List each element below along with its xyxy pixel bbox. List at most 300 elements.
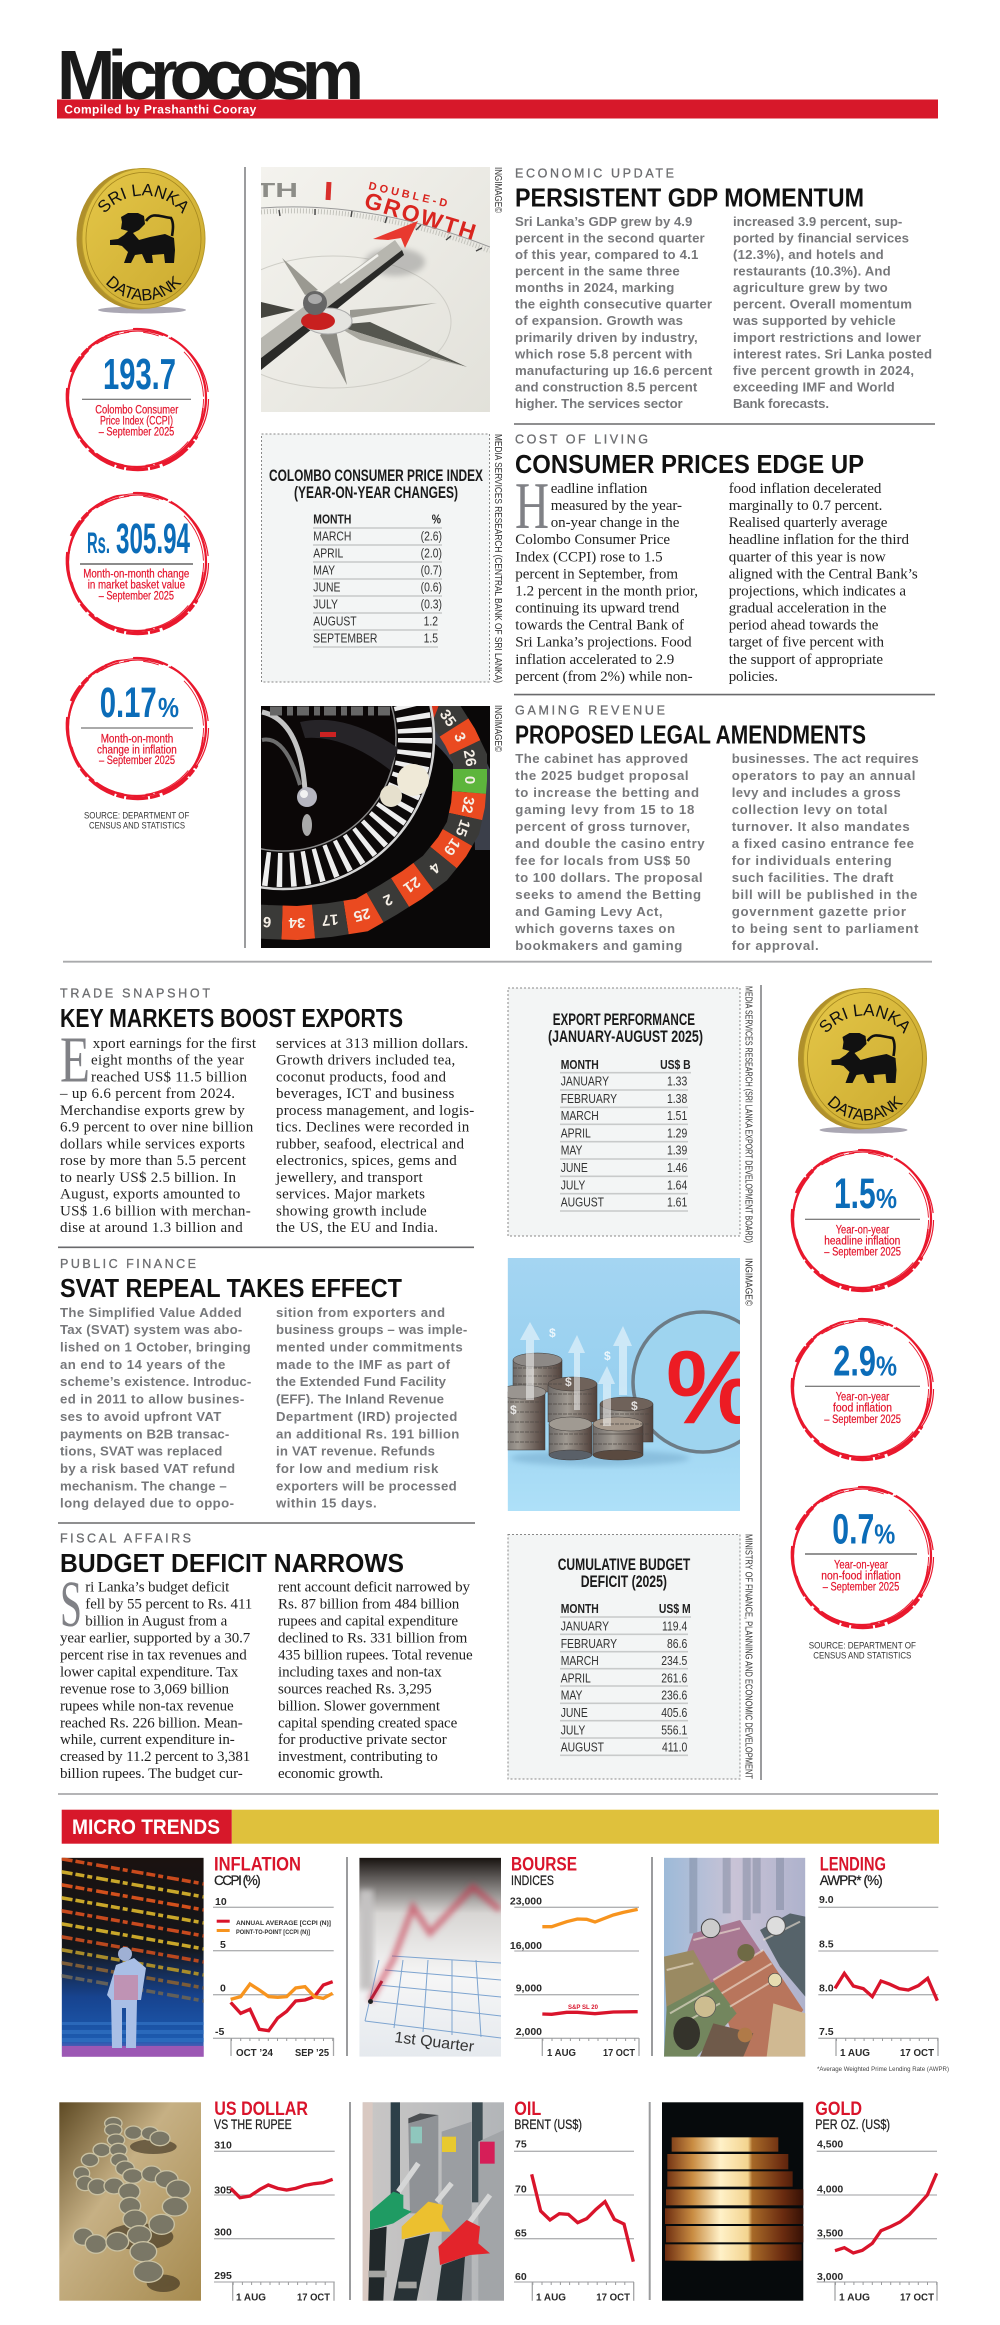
article: Budget Deficit Narrows: S [60,1568,82,1641]
image: banknotes and coins [664,1858,805,2057]
panel: Colombo Consumer Price Index table: (0.6) [421,581,442,595]
article: Budget Deficit Narrows: rent account deficit narrowed by [278,1580,470,1596]
article: SVAT Repeal Takes Effect: The Simplified Value Added [60,1305,242,1320]
article: Budget Deficit Narrows: ri Lanka’s budget deficit [85,1580,230,1596]
panel: Export Performance table: FEBRUARY [561,1092,617,1106]
article: SVAT Repeal Takes Effect: business groups – was imple- [276,1322,467,1337]
chart: Oil Brent: BRENT (US$) [514,2117,582,2132]
stat: food inflation 2.9%: food inflation [833,1403,892,1415]
article: Proposed Legal Amendments: a fixed casino entrance fee [732,836,914,851]
stat: non-food inflation 0.7%: non-food inflation [821,1570,901,1582]
chart: Lending AWPR [818,1855,938,2059]
article: Key Markets Boost Exports: eight months of the year [91,1053,244,1069]
article: Persistent GDP Momentum: of expansion. Growth was [515,313,683,328]
article: Budget Deficit Narrows: percent rise in tax revenues and [60,1647,247,1663]
source note right: CENSUS AND STATISTICS [813,1651,911,1661]
article: Key Markets Boost Exports: August, exports amounted to [60,1187,240,1203]
image: roulette wheel: 35 [436,707,459,730]
image: roulette wheel: 2 [380,890,395,909]
article: Budget Deficit Narrows: revenue rose to 3,069 billion [60,1681,230,1697]
article: SVAT Repeal Takes Effect [60,1257,467,1511]
article: SVAT Repeal Takes Effect: within 15 days. [275,1496,377,1511]
article: Budget Deficit Narrows: including taxes and non-tax [278,1664,442,1680]
chart: Gold per ounce: PER OZ. (US$) [815,2117,890,2132]
image: compass pointing to double-digit growth: DOUBLE-D [367,180,452,211]
panel: Colombo Consumer Price Index table: JUNE [313,581,341,595]
chart: Inflation CCPI: 0 [220,1983,226,1995]
image: roulette wheel: 0 [461,776,478,784]
article: SVAT Repeal Takes Effect: tions, SVAT was replaced [60,1444,222,1459]
credit: Sri Lanka Export Development Board: MEDIA SERVICES RESEARCH (SRI LANKA EXPORT DEVELOPMENT BOARD) [743,986,754,1243]
article: Consumer Prices Edge Up: projections, which indicates a [729,584,906,600]
panel: Export Performance table: US$ B [660,1058,691,1072]
image: roulette wheel: 25 [352,904,372,925]
article: Budget Deficit Narrows: lower capital expenditure. Tax [60,1664,239,1680]
article: Budget Deficit Narrows: BUDGET DEFICIT NARROWS [60,1548,404,1578]
article: Proposed Legal Amendments: for individuals entering [732,853,892,868]
article: SVAT Repeal Takes Effect: exporters will be processed [276,1478,457,1493]
panel: Cumulative Budget Deficit table: APRIL [561,1671,591,1686]
image: coins and percent magnifier [508,1258,740,1511]
article: Key Markets Boost Exports: TRADE SNAPSHOT [60,986,210,1000]
panel: Colombo Consumer Price Index table: (0.7) [421,564,442,578]
stat: market basket Rs. 305.94: – September 2025 [99,591,174,603]
chart: Inflation CCPI: 10 [215,1896,227,1908]
stat: CCPI 193.7: 193.7 [103,350,176,399]
stat: monthly inflation 0.17%: 0.17 [100,679,157,727]
article: Proposed Legal Amendments: and Gaming Levy Act, [515,904,663,919]
article: SVAT Repeal Takes Effect: made to the IMF as part of [276,1357,451,1372]
chart: Oil Brent [514,2099,634,2304]
article: Consumer Prices Edge Up: towards the Central Bank of [515,618,684,634]
panel: Cumulative Budget Deficit table: FEBRUARY [561,1637,617,1651]
article: Consumer Prices Edge Up: eadline inflation [551,481,648,497]
chart: US Dollar vs rupee: 300 [214,2226,232,2238]
article: Proposed Legal Amendments: such facilities. The draft [732,870,894,885]
image: coins forming a dollar sign [59,2102,201,2301]
panel: Colombo Consumer Price Index table: COLOMBO CONSUMER PRICE INDEX [269,467,483,485]
panel: Export Performance table: EXPORT PERFORMANCE [553,1011,695,1029]
panel: Export Performance table: (JANUARY-AUGUST 2025) [548,1028,703,1046]
article: SVAT Repeal Takes Effect: long delayed due to oppo- [60,1496,234,1511]
article: Proposed Legal Amendments: bill will be published in the [732,887,917,902]
article: Consumer Prices Edge Up: aligned with the Central Bank’s [729,566,918,582]
article: Consumer Prices Edge Up: inflation accelerated to 2.9 [515,652,674,668]
stat: CCPI 193.7: Colombo Consumer [95,404,178,416]
stat: market basket Rs. 305.94: Month-on-month change [83,569,189,581]
chart: US Dollar vs rupee: 305 [214,2184,232,2196]
article: Key Markets Boost Exports: services. Major markets [276,1187,425,1203]
article: Proposed Legal Amendments: bookmakers and gaming [515,938,682,953]
chart: Gold per ounce: 3,500 [817,2228,843,2240]
masthead [57,36,938,118]
article: Budget Deficit Narrows: sources reached Rs. 3,295 [278,1681,432,1697]
stat: food inflation 2.9%: % [876,1351,897,1382]
credit: Ingimage roulette: INGIMAGE© [492,705,503,753]
image: roulette wheel: 19 [440,835,463,858]
stat: food inflation 2.9%: – September 2025 [824,1414,901,1426]
article: Budget Deficit Narrows [60,1532,473,1782]
article: Budget Deficit Narrows: rupees and capital expenditure [278,1613,458,1629]
panel: Cumulative Budget Deficit table: 86.6 [667,1637,688,1651]
icon: Sri Lanka Databank coin (right): DATABANK [828,1096,904,1121]
source note left: CENSUS AND STATISTICS [89,821,185,831]
stat: market basket Rs. 305.94: in market basket value [88,580,185,592]
chart: Oil Brent: 17 OCT [596,2292,631,2304]
chart: US Dollar vs rupee [214,2099,335,2304]
article: Budget Deficit Narrows: Rs. 87 billion from 484 billion [278,1596,460,1612]
panel: Cumulative Budget Deficit table: AUGUST [561,1741,604,1755]
article: Budget Deficit Narrows: creased by 11.2 percent to 3,381 [60,1749,250,1765]
article: Persistent GDP Momentum: increased 3.9 percent, sup- [733,214,902,229]
credit: Media Services Research CBSL: MEDIA SERVICES RESEARCH (CENTRAL BANK OF SRI LANKA) [492,434,503,683]
stat: non-food inflation 0.7%: % [874,1518,895,1549]
article: Key Markets Boost Exports: the US, the EU and India. [276,1220,438,1236]
article: Consumer Prices Edge Up: on-year change in the [551,515,680,531]
article: Proposed Legal Amendments: The cabinet has approved [515,751,688,766]
article: Consumer Prices Edge Up: percent (from 2%) while non- [515,669,693,685]
panel: Export Performance table: MARCH [561,1109,599,1123]
panel: Colombo Consumer Price Index table: (YEAR-ON-YEAR CHANGES) [294,484,458,502]
article: Proposed Legal Amendments: gaming levy from 15 to 18 [515,802,694,817]
source note right: SOURCE: DEPARTMENT OF [809,1640,916,1650]
article: Key Markets Boost Exports: Merchandise exports grew by [60,1103,245,1119]
stat: monthly inflation 0.17% [67,657,209,799]
article: Proposed Legal Amendments: turnover. It also mandates [732,819,910,834]
masthead: Microcosm [57,36,364,114]
article: SVAT Repeal Takes Effect: mented under commitments [276,1340,463,1354]
article: Proposed Legal Amendments: percent of gross turnover, [515,819,690,834]
credit: Ministry of Finance: MINISTRY OF FINANCE, PLANNING AND ECONOMIC DEVELOPMENT [743,1534,754,1779]
stat: market basket Rs. 305.94: Rs. [87,527,110,560]
stat: food inflation 2.9%: 2.9 [833,1338,876,1386]
article: Persistent GDP Momentum: and construction 8.5 percent [515,380,698,394]
source note left: SOURCE: DEPARTMENT OF [84,810,190,820]
chart: Inflation CCPI: 5 [220,1939,226,1951]
panel: Cumulative Budget Deficit table: 405.6 [661,1706,688,1720]
source note left [84,810,190,831]
article: Consumer Prices Edge Up: headline inflation for the third [729,532,910,548]
chart: Inflation CCPI: -5 [215,2026,224,2038]
article: Persistent GDP Momentum: percent. Overall momentum [733,297,912,312]
icon: Sri Lanka Databank coin: DATABANK [106,276,182,301]
chart: Bourse indices: 9,000 [516,1983,542,1995]
panel: Colombo Consumer Price Index table: % [432,513,441,527]
article: Proposed Legal Amendments: the 2025 budget proposal [515,768,689,783]
panel: Colombo Consumer Price Index table: 1.2 [424,615,438,629]
chart: Gold per ounce: 4,500 [817,2139,843,2151]
icon: Sri Lanka Databank coin [76,168,206,314]
article: Consumer Prices Edge Up: CONSUMER PRICES EDGE UP [515,449,864,479]
chart: Bourse indices: 1 AUG [547,2047,576,2059]
stat: CCPI 193.7: Price Index (CCPI) [100,415,173,427]
image: coins and percent magnifier: $ [565,1375,572,1389]
chart: Inflation CCPI: CCPI (%) [214,1873,261,1888]
article: Consumer Prices Edge Up: Index (CCPI) rose to 1.5 [515,549,663,565]
image: coins and percent magnifier: $ [549,1326,556,1340]
icon: Sri Lanka Databank coin (right): SRI LANKA [820,1004,909,1034]
article: Persistent GDP Momentum: percent in the same three [515,264,680,278]
article: Proposed Legal Amendments: collection levy on total [732,802,887,817]
panel: Export Performance table: 1.39 [667,1144,687,1158]
stat: monthly inflation 0.17%: change in inflation [97,744,177,756]
article: Key Markets Boost Exports: services at 313 million dollars. [276,1036,468,1052]
image: roulette wheel: 26 [460,748,479,768]
panel: Cumulative Budget Deficit table: MARCH [561,1654,599,1668]
article: Budget Deficit Narrows: reached Rs. 226 billion. Mean- [60,1715,243,1731]
article: Persistent GDP Momentum: import restrictions and lower [733,330,921,345]
image: roulette wheel [261,706,490,948]
chart: Gold per ounce: 3,000 [817,2271,843,2283]
article: SVAT Repeal Takes Effect: PUBLIC FINANCE [60,1257,196,1271]
article: Proposed Legal Amendments: levy and includes a gross [732,785,901,800]
chart: Lending AWPR: LENDING [820,1855,886,1876]
article: Consumer Prices Edge Up: Realised quarterly average [729,515,888,531]
panel: Cumulative Budget Deficit table: JUNE [561,1706,588,1720]
chart: Bourse indices: 2,000 [516,2026,542,2038]
article: Persistent GDP Momentum: five percent growth in 2024, [733,363,914,378]
article: Persistent GDP Momentum: Sri Lanka’s GDP grew by 4.9 [515,214,692,229]
image: roulette wheel: 6 [262,913,272,930]
stat: food inflation 2.9% [792,1318,934,1460]
article: Persistent GDP Momentum: higher. The services sector [515,396,683,411]
article: Proposed Legal Amendments: businesses. The act requires [732,751,919,766]
footnote: AWPR definition: *Average Weighted Prime Lending Rate (AWPR) [817,2066,949,2073]
article: SVAT Repeal Takes Effect: sition from exporters and [276,1305,445,1320]
panel: Cumulative Budget Deficit table: MAY [561,1689,583,1703]
article: Proposed Legal Amendments: operators to pay an annual [732,768,915,783]
article: Persistent GDP Momentum: ECONOMIC UPDATE [515,166,674,180]
article: Consumer Prices Edge Up: food inflation decelerated [729,481,882,497]
chart: US Dollar vs rupee: 1 AUG [236,2292,266,2304]
icon: Sri Lanka Databank coin (right) [798,988,927,1134]
article: Proposed Legal Amendments: to being sent to parliament [732,921,919,936]
article: Persistent GDP Momentum: Bank forecasts. [733,396,829,411]
article: Proposed Legal Amendments: seeks to amend the Betting [515,887,701,902]
panel: Export Performance table: 1.61 [667,1196,687,1210]
article: Consumer Prices Edge Up: gradual acceleration in the [729,601,887,617]
chart: Gold per ounce: 4,000 [817,2184,843,2196]
article: Consumer Prices Edge Up: policies. [729,669,778,685]
panel: Colombo Consumer Price Index table: (0.3) [421,598,442,612]
chart: Gold per ounce [815,2099,937,2304]
chart: Lending AWPR: 1 AUG [840,2047,870,2059]
stat: monthly inflation 0.17%: – September 2025 [99,755,175,767]
chart: Bourse indices: 23,000 [510,1895,542,1907]
image: compass pointing to double-digit growth [261,167,490,412]
article: Proposed Legal Amendments: GAMING REVENUE [515,704,665,718]
panel: Export Performance table: MAY [561,1144,583,1158]
article: Consumer Prices Edge Up [515,432,918,685]
article: Key Markets Boost Exports [59,986,474,1236]
panel: Colombo Consumer Price Index table: JULY [313,598,338,612]
heading: Micro Trends banner [62,1810,939,1844]
chart: Inflation CCPI: SEP ’25 [295,2047,329,2059]
article: Proposed Legal Amendments: fee for locals from US$ 50 [515,853,690,868]
chart: US Dollar vs rupee: 310 [214,2139,232,2151]
article: Key Markets Boost Exports: showing growth include [276,1203,427,1219]
article: Key Markets Boost Exports: E [60,1024,90,1096]
panel: Colombo Consumer Price Index table: (2.6) [421,530,442,544]
chart: US Dollar vs rupee: VS THE RUPEE [214,2117,292,2132]
source note right [809,1640,916,1661]
article: SVAT Repeal Takes Effect: the Extended Fund Facility [276,1374,447,1389]
panel: Export Performance table: MONTH [561,1058,599,1072]
panel: Colombo Consumer Price Index table: APRIL [313,547,344,561]
article: Key Markets Boost Exports: to nearly US$ 2.5 billion. In [60,1170,236,1186]
stat: headline inflation 1.5%: % [876,1183,897,1214]
article: SVAT Repeal Takes Effect: (EFF). The Inland Revenue [276,1392,444,1407]
article: Budget Deficit Narrows: billion. Slower government [278,1698,441,1714]
article: Budget Deficit Narrows: rupees while non-tax revenue [60,1698,234,1714]
article: Budget Deficit Narrows: FISCAL AFFAIRS [60,1532,191,1546]
stat: market basket Rs. 305.94 [67,492,209,634]
panel: Colombo Consumer Price Index table: AUGUST [313,615,357,629]
article: Key Markets Boost Exports: dise at around 1.3 billion and [60,1220,243,1236]
article: Proposed Legal Amendments: and double the casino entry [515,836,705,851]
panel: Colombo Consumer Price Index table: (2.0) [421,547,442,561]
chart: Gold per ounce: 17 OCT [900,2292,935,2304]
panel: Colombo Consumer Price Index table: SEPTEMBER [313,632,377,646]
panel: Export Performance table: 1.46 [667,1161,688,1175]
article: Key Markets Boost Exports: process management, and logis- [276,1103,474,1119]
article: SVAT Repeal Takes Effect: for low and medium risk [276,1461,439,1476]
chart: Bourse indices: 17 OCT [603,2047,636,2059]
panel: Cumulative Budget Deficit table: 556.1 [661,1723,687,1738]
panel: Colombo Consumer Price Index table: MAY [313,564,335,578]
chart: Oil Brent: 70 [515,2184,527,2196]
stat: headline inflation 1.5%: 1.5 [834,1170,876,1218]
panel: Cumulative Budget Deficit table: 236.6 [661,1689,688,1703]
chart: Lending AWPR: 9.0 [819,1894,834,1906]
heading: Micro Trends banner: MICRO TRENDS [72,1816,220,1839]
icon: Sri Lanka Databank coin: SRI LANKA [98,184,188,214]
article: Persistent GDP Momentum: restaurants (10.3%). And [733,264,891,278]
article: SVAT Repeal Takes Effect: payments on B2B transac- [60,1426,229,1441]
article: Key Markets Boost Exports: dollars while services exports [60,1136,245,1152]
article: Budget Deficit Narrows: capital spending created space [278,1715,458,1731]
article: SVAT Repeal Takes Effect: scheme’s existence. Introduc- [60,1374,251,1389]
stat: market basket Rs. 305.94: 305.94 [116,515,190,563]
panel: Cumulative Budget Deficit table: 261.6 [661,1671,688,1686]
article: Consumer Prices Edge Up: target of five percent with [729,635,884,651]
article: Persistent GDP Momentum: of this year, compared to 4.1 [515,247,698,262]
article: Persistent GDP Momentum: agriculture grew by two [733,280,888,295]
chart: Bourse indices: S&P SL 20 [568,2004,598,2011]
article: Budget Deficit Narrows: billion rupees. The budget cur- [60,1766,243,1782]
article: SVAT Repeal Takes Effect: Department (IRD) projected [276,1409,457,1424]
article: Budget Deficit Narrows: 435 billion rupees. Total revenue [278,1647,473,1663]
panel: Export Performance table [508,988,740,1236]
panel: Export Performance table: 1.51 [667,1109,687,1123]
stat: monthly inflation 0.17%: % [158,692,179,723]
article: SVAT Repeal Takes Effect: lished on 1 October, bringing [60,1340,251,1354]
article: Consumer Prices Edge Up: H [515,469,549,543]
article: SVAT Repeal Takes Effect: SVAT REPEAL TAKES EFFECT [60,1273,402,1303]
article: Budget Deficit Narrows: year earlier, supported by a 30.7 [60,1630,251,1646]
article: Proposed Legal Amendments: to increase the betting and [515,785,699,800]
article: Proposed Legal Amendments: which governs taxes on [514,921,675,936]
stat: food inflation 2.9%: Year-on-year [836,1391,889,1403]
article: Persistent GDP Momentum: primarily driven by industry, [515,330,698,345]
chart: Oil Brent: 65 [515,2228,527,2240]
article: Budget Deficit Narrows: while, current expenditure in- [60,1732,235,1748]
article: Consumer Prices Edge Up: COST OF LIVING [515,432,648,446]
article: Consumer Prices Edge Up: marginally to 0.7 percent. [729,498,882,514]
article: Budget Deficit Narrows: economic growth. [278,1766,383,1782]
article: Persistent GDP Momentum: which rose 5.8 percent with [514,346,692,361]
article: Persistent GDP Momentum: interest rates. Sri Lanka posted [733,346,932,361]
article: Budget Deficit Narrows: fell by 55 percent to Rs. 411 [85,1596,252,1612]
image: roulette wheel: 17 [321,910,339,929]
image: compass pointing to double-digit growth: TH [256,180,298,202]
article: Persistent GDP Momentum: percent in the second quarter [515,230,705,245]
article: Budget Deficit Narrows: investment, contributing to [278,1749,438,1765]
chart: Inflation CCPI [213,1855,334,2059]
article: Key Markets Boost Exports: coconut products, food and [276,1070,446,1086]
chart: Oil Brent: 1 AUG [536,2292,566,2304]
article: Key Markets Boost Exports: beverages, ICT and business [276,1086,454,1102]
chart: Inflation CCPI: INFLATION [214,1855,301,1876]
article: Proposed Legal Amendments: PROPOSED LEGAL AMENDMENTS [515,719,866,749]
image: roulette wheel: 15 [452,817,473,839]
image: roulette wheel: 32 [458,795,477,815]
image: compass pointing to double-digit growth: GROWTH [362,187,481,246]
article: Persistent GDP Momentum: ported by financial services [733,230,909,245]
stat: non-food inflation 0.7% [792,1486,934,1628]
article: Key Markets Boost Exports: Growth drivers included tea, [276,1053,455,1069]
article: SVAT Repeal Takes Effect: in VAT revenue. Refunds [276,1444,435,1459]
chart: US Dollar vs rupee: 17 OCT [297,2292,331,2304]
article: SVAT Repeal Takes Effect: mechanism. The change – [60,1478,227,1493]
credit: Ingimage coins: INGIMAGE© [743,1258,754,1307]
image: roulette wheel: 21 [400,873,423,896]
panel: Export Performance table: JANUARY [561,1074,609,1089]
article: Persistent GDP Momentum: was supported by vehicle [732,313,896,328]
chart: Oil Brent: OIL [514,2099,542,2120]
panel: Export Performance table: 1.38 [667,1092,688,1106]
panel: Cumulative Budget Deficit table: DEFICIT (2025) [581,1573,667,1591]
image: coins and percent magnifier: $ [510,1403,517,1417]
article: Key Markets Boost Exports: jewellery, and transport [275,1170,424,1186]
article: Consumer Prices Edge Up: Sri Lanka’s projections. Food [515,635,692,651]
stat: non-food inflation 0.7%: 0.7 [832,1505,874,1553]
stat: headline inflation 1.5%: headline inflation [824,1236,900,1248]
image: roulette wheel: 4 [425,859,444,877]
stat: monthly inflation 0.17%: Month-on-month [101,733,173,745]
article: Persistent GDP Momentum: (12.3%), and hotels and [733,247,884,262]
article: Key Markets Boost Exports: – up 6.6 percent from 2024. [59,1086,235,1102]
article: Consumer Prices Edge Up: quarter of this year is now [729,549,886,565]
chart: Inflation CCPI: OCT ’24 [236,2047,273,2059]
panel: Cumulative Budget Deficit table: MONTH [561,1602,599,1616]
chart: Oil Brent: 60 [515,2271,527,2283]
article: Key Markets Boost Exports: tics. Declines were recorded in [276,1120,470,1136]
chart: Lending AWPR: 8.5 [819,1939,834,1951]
image: coins and percent magnifier: $ [631,1399,638,1413]
article: SVAT Repeal Takes Effect: ses to avoid upfront VAT [60,1409,221,1424]
masthead: Compiled by Prashanthi Cooray [64,102,257,116]
panel: Export Performance table: 1.29 [667,1126,687,1141]
chart: Lending AWPR: 17 OCT [900,2047,935,2059]
image: coins and percent magnifier: % [666,1330,758,1446]
image: blurred first quarter graph: 1st Quarter [394,2029,475,2056]
article: Key Markets Boost Exports: electronics, spices, gems and [276,1153,457,1169]
panel: Cumulative Budget Deficit table: 411.0 [662,1741,688,1755]
article: Budget Deficit Narrows: for productive private sector [278,1732,447,1748]
article: SVAT Repeal Takes Effect: an additional Rs. 191 billion [276,1426,459,1441]
image: gold bars [662,2102,803,2301]
